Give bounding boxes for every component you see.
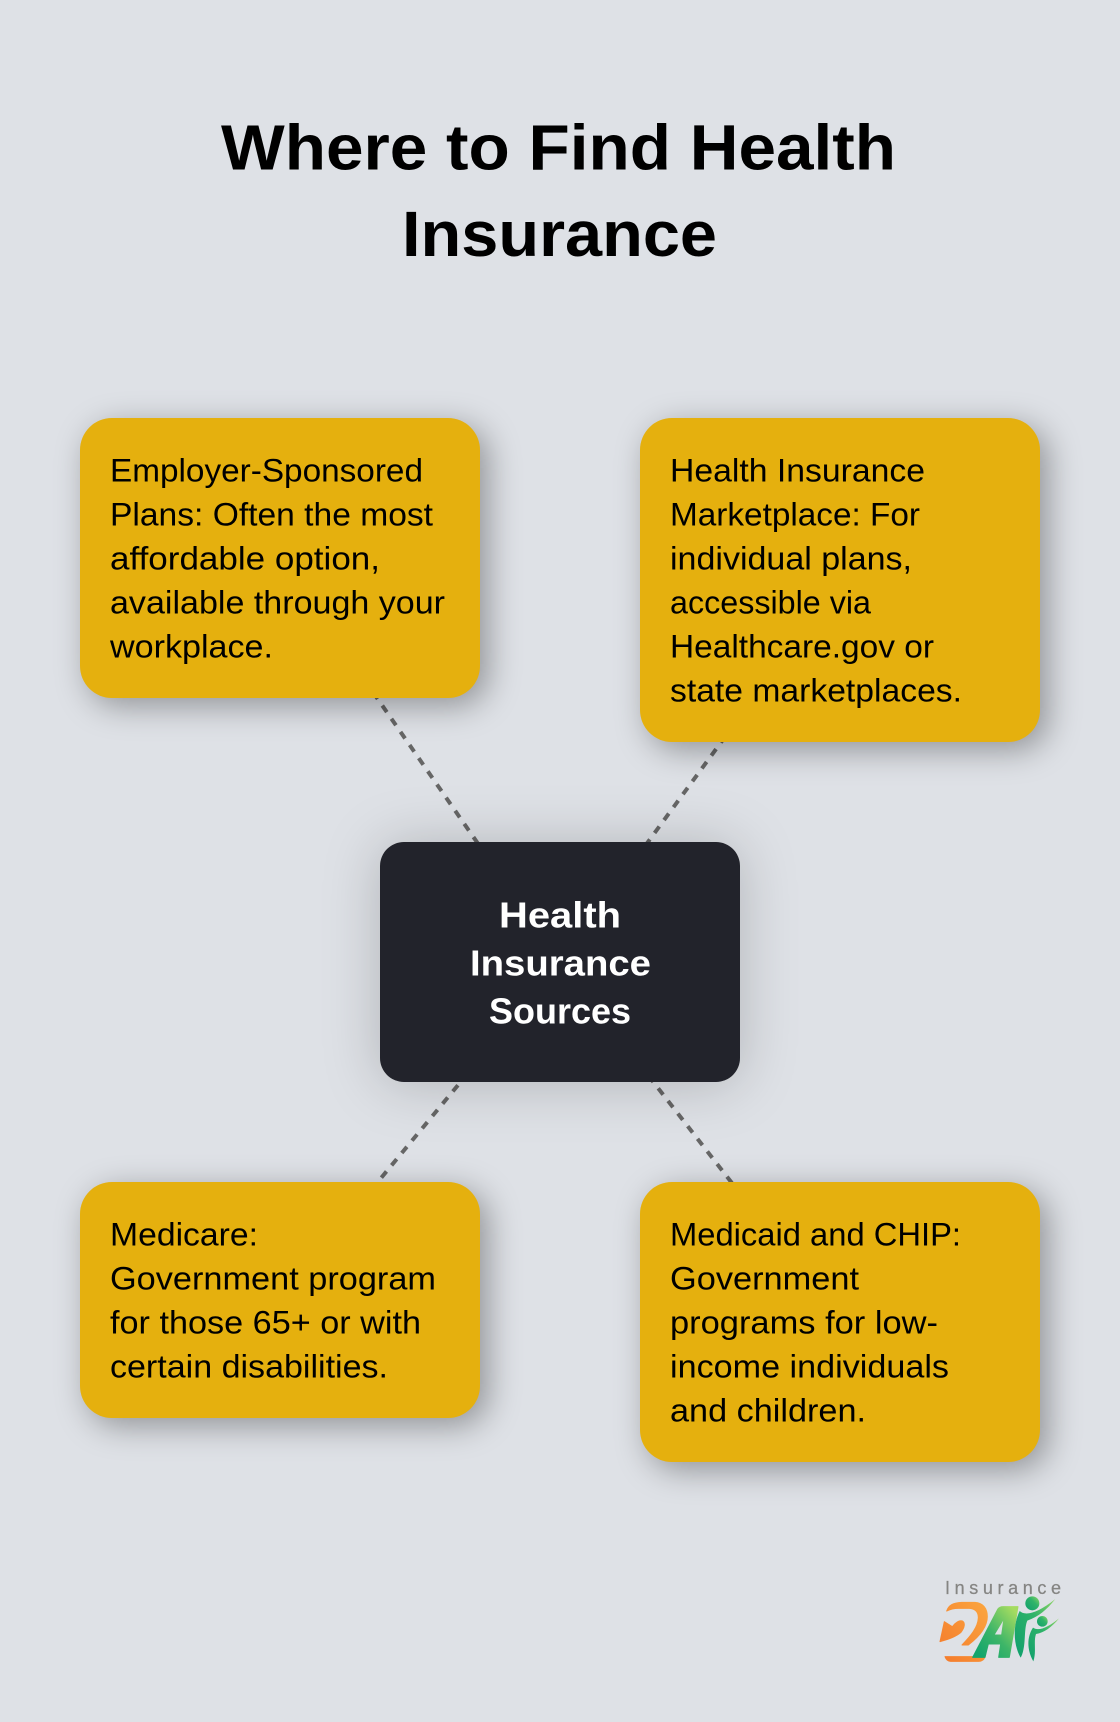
- panel: medicaid and chip: [640, 1182, 1040, 1462]
- panel: medicaid and chip: and children.: [670, 1392, 866, 1428]
- connector: medicare to centre: [280, 962, 560, 1300]
- connector: medicaid to centre: [560, 962, 840, 1322]
- panel: employer-sponsored plans: Plans: Often the most: [110, 496, 433, 532]
- title: [221, 112, 896, 270]
- dashed connectors: [280, 558, 840, 1322]
- panel: medicare: for those 65+ or with: [110, 1304, 421, 1340]
- panel: medicaid and chip: programs for low-: [670, 1304, 938, 1340]
- panel: health insurance marketplace: Marketplace: For: [670, 496, 920, 532]
- panel: employer-sponsored plans: affordable option,: [110, 540, 380, 576]
- panel: medicare: [80, 1182, 480, 1418]
- title: Where to Find Health: [221, 112, 896, 184]
- panel: medicare: certain disabilities.: [110, 1348, 388, 1384]
- panel: employer-sponsored plans: Employer-Sponsored: [110, 452, 423, 488]
- panel: employer-sponsored plans: available through your: [110, 584, 445, 620]
- panel: centre node: Sources: [489, 990, 631, 1032]
- panel: health insurance marketplace: accessible via: [670, 584, 871, 620]
- panel: medicaid and chip: income individuals: [670, 1348, 949, 1384]
- panel: centre node: Insurance: [470, 942, 651, 984]
- icon: green A: [973, 1607, 1018, 1657]
- title: Insurance: [402, 198, 717, 270]
- panel: health insurance marketplace: Health Insurance: [670, 452, 925, 488]
- panel: health insurance marketplace: individual plans,: [670, 540, 912, 576]
- connector: marketplace to centre: [560, 580, 840, 962]
- icon: small figure: [1028, 1616, 1059, 1661]
- connector: employer plans to centre: [280, 558, 560, 962]
- panel: medicaid and chip: Government: [670, 1260, 859, 1296]
- panel: medicaid and chip: Medicaid and CHIP:: [670, 1216, 961, 1252]
- panel: health insurance marketplace: Healthcare.gov or: [670, 628, 934, 664]
- panel: employer-sponsored plans: [80, 418, 480, 698]
- panel: health insurance marketplace: state marketplaces.: [670, 672, 962, 708]
- logo: Insurance 2Ai: [940, 1578, 1061, 1661]
- icon: large figure: [1015, 1596, 1055, 1658]
- panel: centre node: [380, 842, 740, 1082]
- panel: health insurance marketplace: [640, 418, 1040, 742]
- logo: Insurance 2Ai: Insurance: [945, 1578, 1061, 1598]
- panel: employer-sponsored plans: workplace.: [109, 628, 273, 664]
- icon: orange 2: [940, 1602, 987, 1661]
- panel: centre node: Health: [499, 894, 621, 936]
- panel: medicare: Medicare:: [110, 1216, 258, 1252]
- panel: medicare: Government program: [110, 1260, 436, 1296]
